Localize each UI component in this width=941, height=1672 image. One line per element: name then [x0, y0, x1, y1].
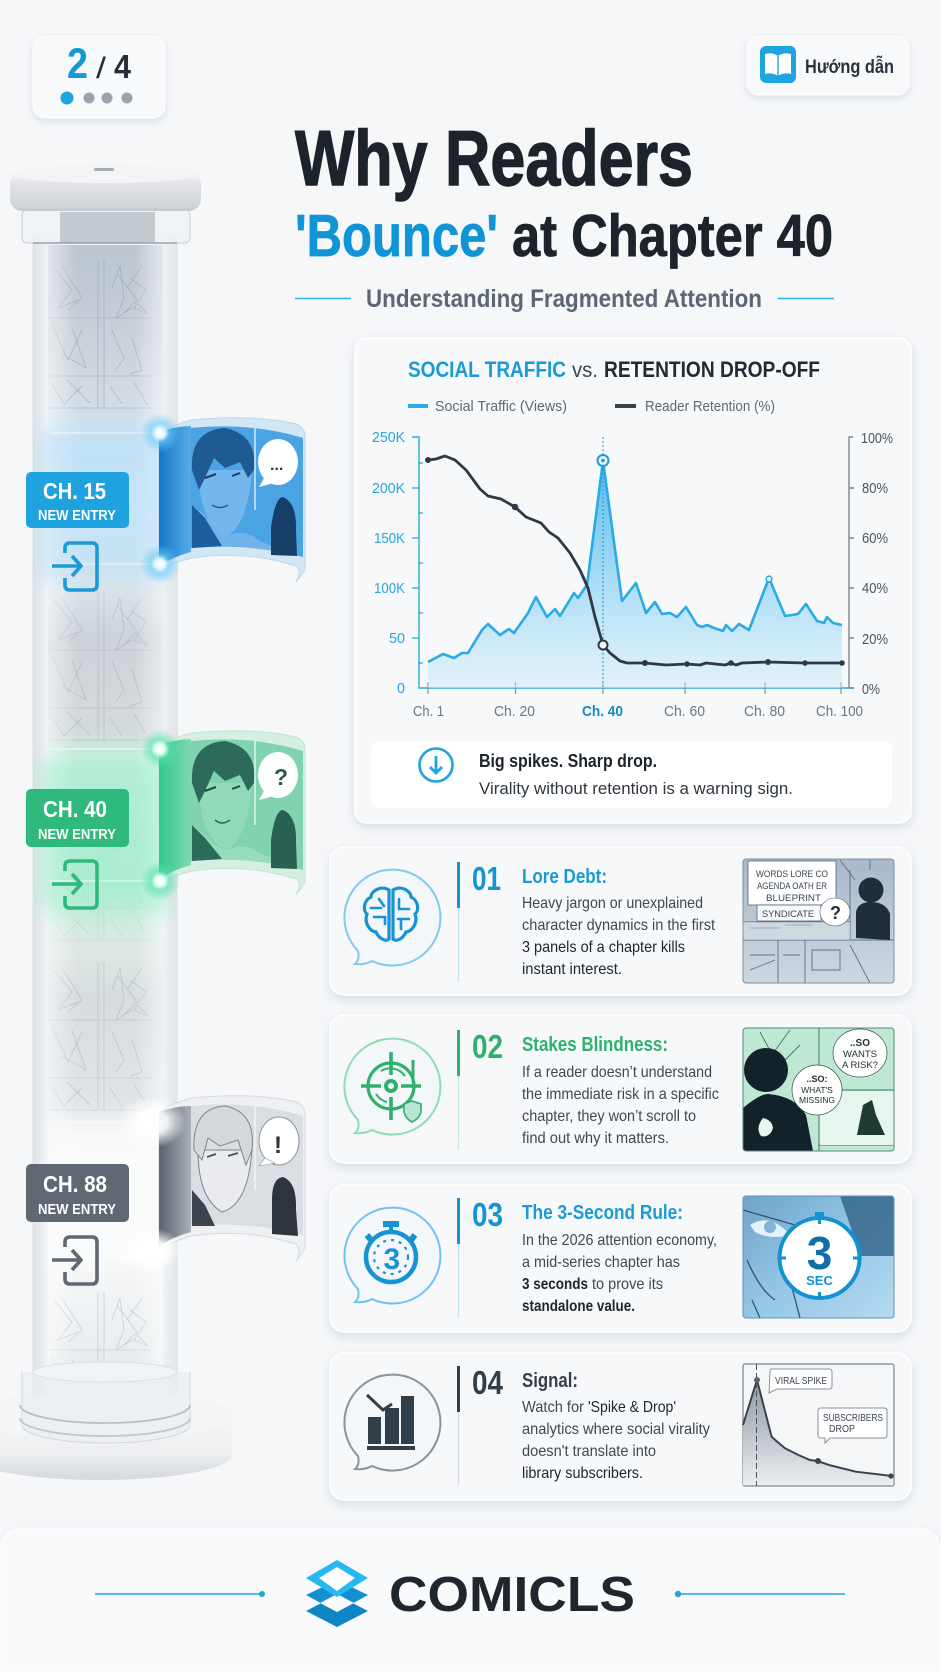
body text: a mid-series chapter has — [522, 1254, 680, 1271]
manga panel: ch. 15: ... — [270, 457, 283, 474]
manga panel: ch. 88 — [159, 1096, 305, 1262]
body text: doesn't translate into — [522, 1443, 656, 1460]
manga thumbnail: stakes: ..SO: — [806, 1074, 828, 1084]
chapter tag: ch. 40: CH. 40 — [43, 796, 107, 822]
divider — [458, 1366, 460, 1485]
body text: analytics where social virality — [522, 1421, 710, 1438]
glass tube with manga scroll — [0, 165, 232, 1480]
body text — [522, 1232, 717, 1315]
body text: If a reader doesn’t understand — [522, 1064, 712, 1081]
panel: 02 stakes blindness — [330, 1015, 911, 1163]
colour glows in tube — [36, 430, 174, 1270]
icon: down arrow — [420, 748, 452, 782]
axes — [412, 437, 854, 694]
panel: 02 stakes blindness: Stakes Blindness: — [522, 1034, 668, 1056]
icon: stopwatch in bubble — [344, 1208, 440, 1304]
panel: 04 signal — [330, 1353, 911, 1500]
ring lines — [50, 433, 160, 1258]
body text: instant interest. — [522, 961, 622, 978]
body text: Heavy jargon or unexplained — [522, 895, 703, 912]
rolled manga pages — [48, 245, 163, 1440]
chapter tag: ch. 15: NEW ENTRY — [38, 507, 116, 524]
mini chart thumbnail — [743, 1364, 894, 1486]
line chart: Ch. 1 — [413, 703, 444, 720]
body text: In the 2026 attention economy, — [522, 1232, 717, 1249]
footer: COMICLS — [389, 1568, 635, 1622]
axis labels — [372, 429, 405, 697]
page badge: 2 / 4: 2 — [67, 40, 88, 88]
axis labels: 50 — [389, 630, 405, 647]
panel: 02 stakes blindness: 02 — [472, 1028, 503, 1065]
body text: Watch for — [522, 1399, 585, 1416]
callout — [371, 741, 892, 808]
panel: chart card — [355, 338, 911, 823]
footer — [0, 1528, 941, 1672]
ch. 40 marker — [602, 437, 604, 688]
body text: chapter, they won’t scroll to — [522, 1108, 696, 1125]
logo mark — [306, 1560, 368, 1627]
body text: 3 panels of a chapter kills — [522, 939, 685, 956]
icon: brain in bubble — [344, 870, 440, 966]
axis labels: 250K — [372, 429, 405, 446]
chart title — [408, 357, 820, 382]
line chart — [372, 429, 893, 720]
manga thumbnail with stopwatch: SEC — [806, 1273, 833, 1288]
page badge: 2 / 4: 4 — [114, 48, 132, 85]
axis labels: 200K — [372, 480, 405, 497]
manga thumbnail: stakes: ..SO — [850, 1038, 870, 1049]
body text: library subscribers. — [522, 1465, 643, 1482]
callout: Virality without retention is a warning sign. — [479, 779, 793, 798]
top collar — [22, 210, 190, 243]
mini chart thumbnail: VIRAL SPIKE — [775, 1376, 827, 1387]
panel: 04 signal: 04 — [472, 1364, 504, 1401]
manga thumbnail: lore debt: WORDS LORE CO — [756, 869, 828, 879]
line chart: Ch. 40 — [582, 703, 623, 720]
divider — [458, 1030, 460, 1150]
body text — [522, 1064, 719, 1147]
axis labels: 150K — [374, 530, 405, 547]
title: Why Readers — [295, 114, 693, 202]
manga thumbnail: lore debt: BLUEPRINT — [766, 893, 822, 903]
line chart: 60% — [862, 530, 888, 547]
tube wall — [33, 235, 177, 1395]
chapter tag: ch. 15: CH. 15 — [43, 478, 106, 504]
line chart: Ch. 100 — [816, 703, 863, 720]
chart title: SOCIAL TRAFFIC — [408, 357, 566, 382]
chart legend: Reader Retention (%) — [645, 399, 775, 415]
title: at Chapter 40 — [512, 203, 833, 269]
chart title: vs. — [572, 359, 598, 382]
connector glows: ch. 88 — [118, 1096, 186, 1272]
callout: Big spikes. Sharp drop. — [479, 751, 657, 771]
axis labels: 100K — [374, 580, 405, 597]
manga thumbnail: lore debt: SYNDICATE — [762, 909, 814, 919]
page badge: 2 / 4: / — [96, 52, 107, 85]
chapter tag: ch. 40 — [26, 789, 129, 847]
body text: find out why it matters. — [522, 1130, 669, 1147]
subtitle: Understanding Fragmented Attention — [366, 285, 762, 313]
manga thumbnail: stakes: WHAT'S — [801, 1085, 833, 1095]
icon: entry door green — [52, 861, 97, 908]
panel: 01 lore debt: 01 — [472, 860, 501, 897]
panel: 03 the 3-second rule: 03 — [472, 1196, 503, 1233]
icon: entry door blue — [52, 543, 97, 590]
manga thumbnail: stakes: MISSING — [799, 1095, 835, 1105]
manga thumbnail: lore debt: ? — [830, 903, 841, 923]
line chart: 40% — [862, 580, 888, 597]
chapter tag: ch. 40: NEW ENTRY — [38, 826, 116, 843]
icon: entry door gray — [52, 1237, 97, 1284]
body text: to prove its — [592, 1276, 663, 1293]
panel: 03 the 3-second rule — [330, 1185, 911, 1332]
top cap — [10, 165, 201, 211]
manga thumbnail: stakes — [743, 1028, 894, 1151]
chapter tag: ch. 15 — [26, 472, 129, 528]
chart legend — [408, 399, 775, 415]
panel: 03 the 3-second rule: The 3-Second Rule: — [522, 1202, 683, 1224]
manga panel: ch. 88: ! — [274, 1132, 282, 1159]
icon: target in bubble — [344, 1039, 440, 1135]
panel: 01 lore debt: Lore Debt: — [522, 866, 607, 888]
social traffic line — [428, 461, 842, 662]
icon: bar chart in bubble — [344, 1375, 440, 1471]
chart title: RETENTION DROP-OFF — [604, 357, 820, 382]
guide button — [747, 36, 909, 95]
chapter tag: ch. 88 — [26, 1164, 129, 1222]
body text: 'Spike & Drop' — [588, 1399, 676, 1416]
body text — [522, 1399, 710, 1482]
mini chart thumbnail: SUBSCRIBERS — [823, 1413, 883, 1424]
line chart: 20% — [862, 631, 888, 648]
social traffic area — [428, 461, 842, 688]
title — [295, 114, 833, 269]
mini chart thumbnail: DROP — [829, 1424, 855, 1435]
base collar — [20, 1362, 190, 1443]
body text: 3 seconds — [522, 1276, 588, 1293]
body text — [522, 895, 715, 978]
connector glows: ch. 40 — [140, 729, 180, 901]
manga panel: ch. 40: ? — [274, 764, 288, 790]
body text: the immediate risk in a specific — [522, 1086, 719, 1103]
icon: open book — [760, 46, 796, 83]
guide button: Hướng dẫn — [805, 56, 894, 78]
manga panel: ch. 40 — [159, 731, 305, 895]
line chart: Ch. 20 — [494, 703, 535, 720]
connector glows: ch. 15 — [140, 413, 180, 584]
chapter tag: ch. 88: CH. 88 — [43, 1171, 107, 1197]
chapter tag: ch. 88: NEW ENTRY — [38, 1201, 116, 1218]
panel: 04 signal: Signal: — [522, 1370, 578, 1392]
data markers — [425, 455, 845, 667]
divider — [458, 1198, 460, 1318]
body text: character dynamics in the first — [522, 917, 715, 934]
manga thumbnail with stopwatch — [743, 1196, 894, 1318]
line chart: 100% — [861, 430, 893, 447]
line chart: Ch. 80 — [744, 703, 785, 720]
body text: standalone value. — [522, 1298, 635, 1315]
line chart: 80% — [862, 480, 888, 497]
page badge: 2 / 4 — [33, 36, 165, 118]
panel: 01 lore debt — [330, 847, 911, 995]
line chart: 0% — [862, 681, 880, 698]
manga thumbnail: lore debt: AGENDA OATH ER — [757, 881, 827, 891]
divider — [458, 862, 460, 982]
manga panel: ch. 15 — [159, 418, 305, 582]
manga thumbnail: lore debt — [743, 859, 894, 983]
chart legend: Social Traffic (Views) — [435, 399, 567, 415]
manga thumbnail: stakes: WANTS — [843, 1049, 877, 1060]
axis labels: 0 — [397, 680, 405, 697]
manga thumbnail with stopwatch: 3 — [807, 1227, 832, 1279]
line chart: Ch. 60 — [664, 703, 705, 720]
reader retention line — [428, 456, 842, 665]
base disc — [0, 1390, 232, 1480]
icon: stopwatch in bubble: 3 — [384, 1243, 400, 1276]
title: 'Bounce' — [295, 203, 498, 269]
manga thumbnail: stakes: A RISK? — [842, 1060, 878, 1071]
